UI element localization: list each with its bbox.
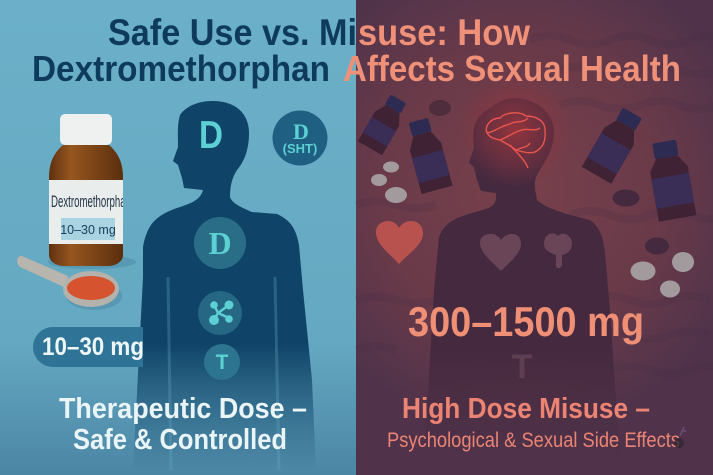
marker D (SHT) — [272, 110, 328, 166]
title: suse: How — [358, 12, 530, 53]
marker T: T — [216, 351, 229, 374]
panel: safe use background — [0, 0, 356, 475]
caption: therapeutic dose: Safe & Controlled — [73, 424, 287, 456]
head glow — [457, 72, 573, 188]
panel: safe use figure — [133, 101, 316, 470]
icon: medicine bottle — [48, 114, 136, 269]
icon: bottle 1 — [358, 92, 411, 155]
caption: high dose misuse: Psychological & Sexual Side Effects — [387, 429, 680, 452]
title: Safe Use vs. Mi — [108, 12, 357, 53]
chest marker D: D — [208, 225, 232, 261]
icon: reproductive organ — [544, 233, 572, 268]
body silhouette — [424, 98, 620, 460]
dose pill: 10–30 mg: 10–30 mg — [42, 333, 144, 361]
dose pill: 10–30 mg — [33, 327, 144, 367]
title: Dextromethorphan — [32, 48, 330, 89]
body silhouette — [133, 101, 316, 470]
caption: therapeutic dose — [59, 393, 307, 456]
chest marker D — [194, 217, 246, 269]
icon: bottle 4 — [645, 138, 696, 222]
dose label: 300–1500 mg: 300–1500 mg — [408, 298, 644, 345]
icon: body heart — [480, 234, 521, 271]
icon: bottle 2 — [403, 116, 453, 194]
panel: misuse background — [356, 0, 713, 475]
letter T: T — [512, 348, 533, 386]
icon: spoon with syrup — [17, 256, 122, 310]
caption: high dose misuse: High Dose Misuse – — [402, 393, 650, 425]
icon: medicine bottle: Dextromethorphan — [51, 192, 131, 211]
title: Affects Sexual Health — [343, 48, 681, 89]
misuse wave texture — [356, 36, 713, 374]
icon: scattered pills — [371, 100, 694, 298]
caption: therapeutic dose: Therapeutic Dose – — [59, 393, 307, 425]
panel: misuse figure — [424, 72, 620, 460]
caption: high dose misuse — [387, 393, 680, 452]
title — [32, 12, 681, 89]
letter D in head: D — [199, 114, 223, 157]
molecule marker — [198, 291, 242, 335]
watermark — [674, 427, 686, 448]
marker D (SHT): (SHT) — [283, 141, 317, 156]
icon: medicine bottle: 10–30 mg — [60, 223, 116, 237]
marker T — [204, 344, 240, 380]
arm gaps — [168, 277, 279, 470]
icon: bottle 3 — [582, 104, 647, 184]
marker D (SHT): D — [293, 119, 309, 144]
icon: glowing brain — [486, 113, 545, 168]
icon: heart — [376, 221, 423, 264]
